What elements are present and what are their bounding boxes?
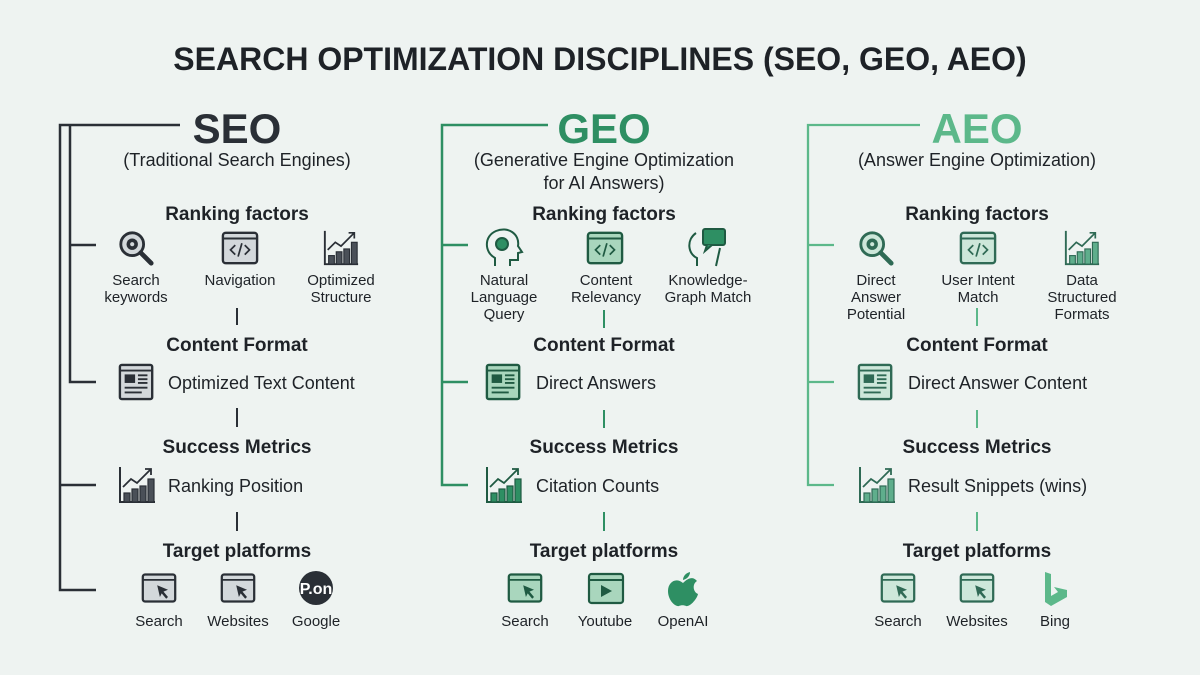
panel: SEO (60, 105, 375, 630)
heading: target platforms: Target platforms (903, 541, 1051, 562)
labels: ranking factors (847, 272, 1117, 323)
text: optimized text content: Optimized Text Content (168, 373, 355, 393)
icon: head with gear (487, 229, 522, 266)
icon: knowledge graph (689, 229, 725, 266)
labels: platforms: Bing (1040, 613, 1070, 630)
labels: ranking factors: keywords (104, 289, 168, 306)
subtitle: GEO (474, 150, 734, 193)
labels: ranking factors: Structure (311, 289, 371, 306)
heading: success metrics: Success Metrics (903, 437, 1051, 458)
heading: ranking factors: Ranking factors (905, 204, 1049, 225)
icon: content relevancy (588, 233, 622, 263)
labels: ranking factors: Content (580, 272, 633, 289)
icon: optimized structure (325, 231, 358, 264)
icon: document (487, 365, 519, 399)
icon: search window (509, 574, 541, 602)
icon: search window (143, 574, 175, 602)
labels: ranking factors: Match (958, 289, 998, 306)
labels: ranking factors: Data (1066, 272, 1098, 289)
labels: ranking factors: Optimized (307, 272, 375, 289)
labels: ranking factors: Knowledge- (668, 272, 748, 289)
icon: direct answer (861, 233, 891, 263)
labels: platforms (501, 613, 708, 630)
icon: user intent (961, 233, 995, 263)
heading: content format: Content Format (166, 335, 308, 356)
heading: ranking factors: Ranking factors (532, 204, 676, 225)
title: SEARCH OPTIMIZATION DISCIPLINES (SEO, GEO, AEO) (173, 41, 1027, 77)
icon: chart (120, 467, 155, 502)
labels: platforms: OpenAI (658, 613, 708, 630)
labels: platforms: Search (501, 613, 549, 630)
labels: ranking factors: Potential (847, 306, 905, 323)
text: citation counts: Citation Counts (536, 476, 659, 496)
text: direct answer content: Direct Answer Content (908, 373, 1087, 393)
icon: chart (487, 467, 522, 502)
bracket: AEO (808, 125, 920, 485)
labels: platforms: Youtube (578, 613, 632, 630)
heading: AEO: AEO (931, 105, 1023, 152)
labels: ranking factors: Direct (856, 272, 896, 289)
subtitle: AEO: (Answer Engine Optimization) (858, 150, 1096, 170)
icon: google (299, 571, 333, 605)
icon: bing (1045, 572, 1067, 606)
subtitle: SEO: (Traditional Search Engines) (123, 150, 351, 170)
icon: websites window (961, 574, 993, 602)
labels: platforms (135, 613, 340, 630)
labels: ranking factors: Language (471, 289, 537, 306)
icon: document (120, 365, 152, 399)
labels: ranking factors: Query (484, 306, 525, 323)
bracket: SEO (60, 125, 180, 590)
labels: ranking factors (104, 272, 375, 306)
icon: openai apple (668, 572, 698, 606)
heading: content format: Content Format (533, 335, 675, 356)
heading: SEO: SEO (193, 105, 281, 152)
subtitle: GEO: for AI Answers) (543, 173, 665, 193)
subtitle: GEO: (Generative Engine Optimization (474, 150, 734, 170)
labels: platforms: Websites (207, 613, 269, 630)
labels: ranking factors: User Intent (941, 272, 1016, 289)
icon: search keywords (121, 233, 151, 263)
heading: GEO: GEO (557, 105, 651, 152)
heading: content format: Content Format (906, 335, 1048, 356)
labels: platforms (874, 613, 1070, 630)
heading: target platforms: Target platforms (530, 541, 678, 562)
labels: platforms: Google (292, 613, 340, 630)
heading: ranking factors: Ranking factors (165, 204, 309, 225)
heading: target platforms: Target platforms (163, 541, 311, 562)
icon: websites window (222, 574, 254, 602)
icon: google: P.on (300, 581, 332, 598)
text: direct answers: Direct Answers (536, 373, 656, 393)
labels: platforms: Search (874, 613, 922, 630)
labels: ranking factors (471, 272, 751, 323)
labels: ranking factors: Structured (1047, 289, 1117, 306)
bracket: GEO (442, 125, 548, 485)
heading: success metrics: Success Metrics (530, 437, 678, 458)
icon: data formats (1066, 231, 1099, 264)
icon: youtube (589, 574, 623, 603)
icon: chart (860, 467, 895, 502)
labels: ranking factors: Natural (480, 272, 528, 289)
icon: search window (882, 574, 914, 602)
labels: platforms: Websites (946, 613, 1008, 630)
labels: ranking factors: Graph Match (665, 289, 751, 306)
panel: AEO (808, 105, 1117, 630)
labels: ranking factors: Answer (851, 289, 901, 306)
icon: navigation (223, 233, 257, 263)
labels: ranking factors: Formats (1054, 306, 1110, 323)
text: result snippets: Result Snippets (wins) (908, 476, 1087, 496)
heading: success metrics: Success Metrics (163, 437, 311, 458)
labels: ranking factors: Search (112, 272, 160, 289)
panel: GEO (442, 105, 751, 630)
labels: platforms: Search (135, 613, 183, 630)
labels: ranking factors: Relevancy (571, 289, 642, 306)
text: ranking position: Ranking Position (168, 476, 303, 496)
icon: document (859, 365, 891, 399)
labels: ranking factors: Navigation (205, 272, 275, 289)
